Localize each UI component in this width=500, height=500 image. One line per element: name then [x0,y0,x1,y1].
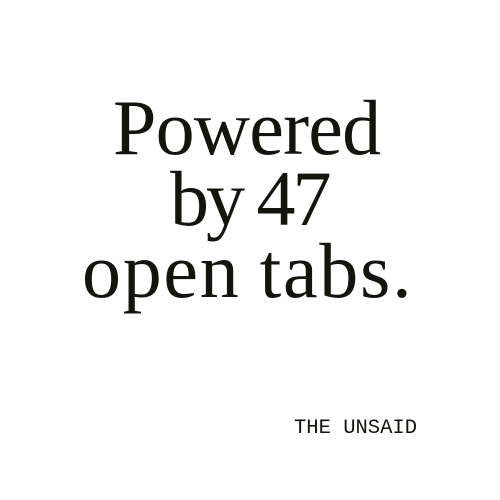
headline: Powered [113,84,380,171]
headline: by 47 [170,155,328,242]
headline [82,84,413,314]
brand name: THE UNSAID [294,417,417,440]
headline: open tabs. [82,227,413,314]
